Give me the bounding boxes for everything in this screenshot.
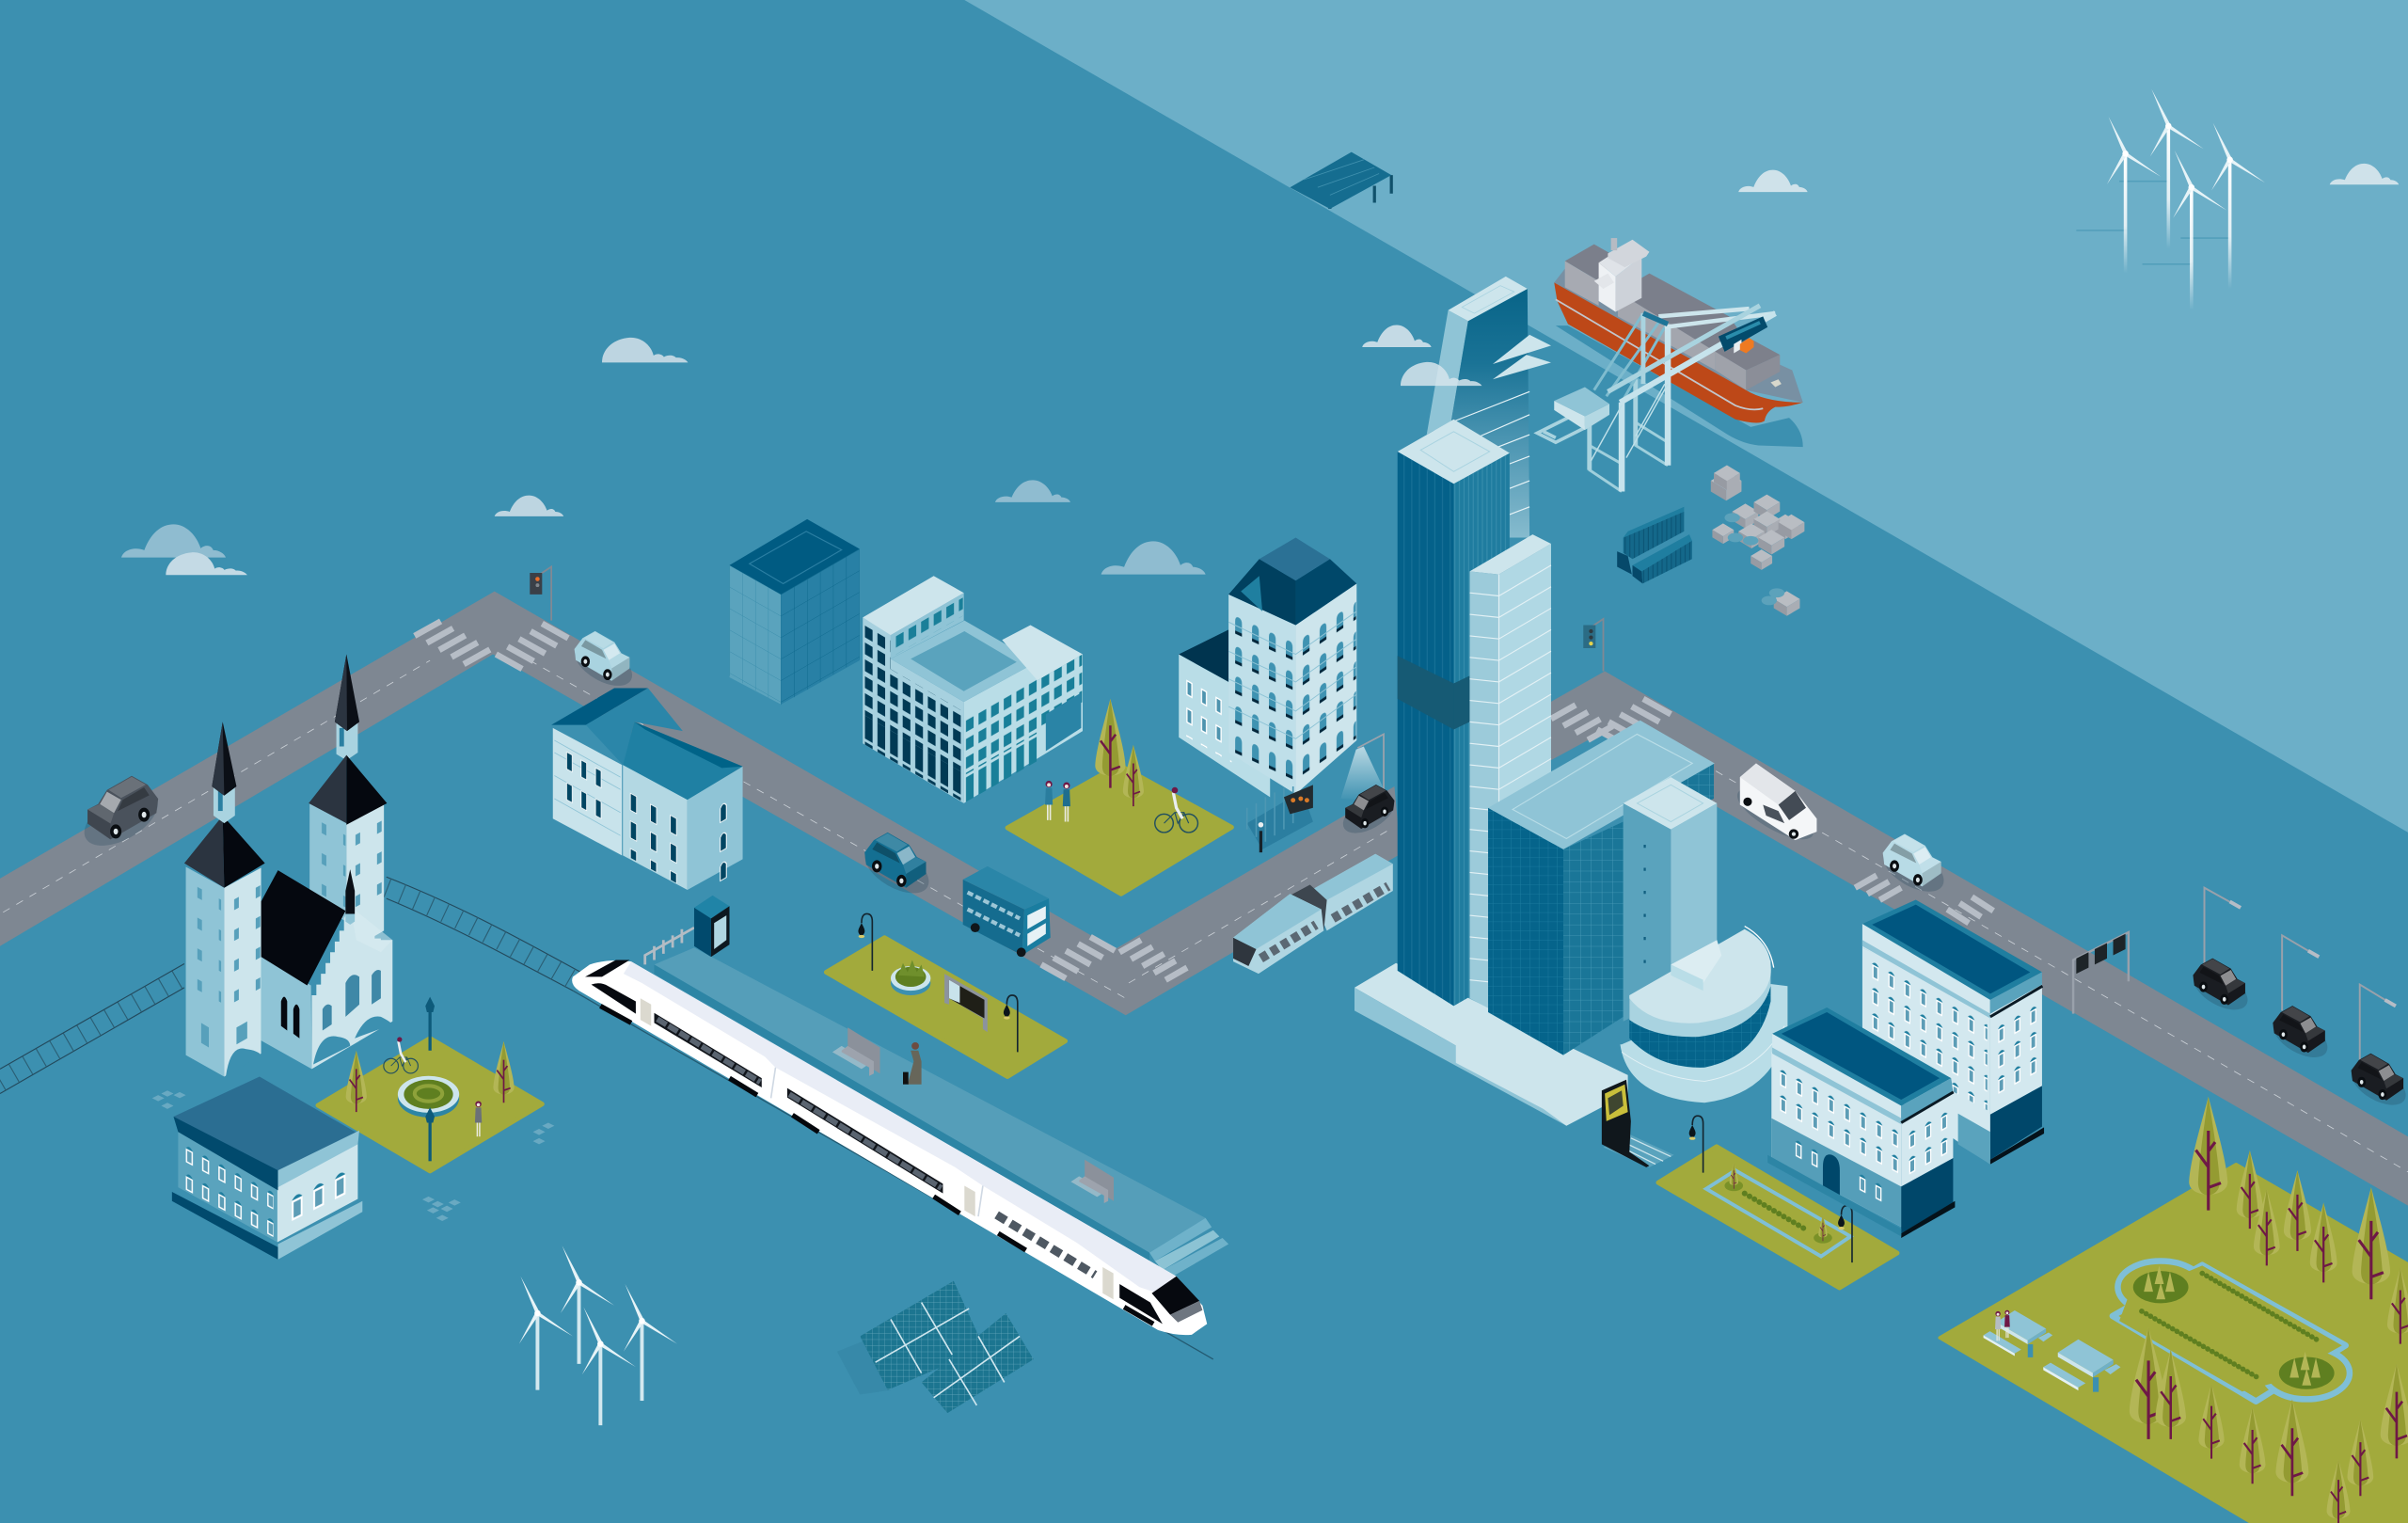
street lamp with light cone — [1340, 734, 1390, 801]
harbour crane — [1537, 306, 1775, 491]
high speed train — [572, 960, 1213, 1359]
street lamps along the highway — [2205, 888, 2396, 1060]
paving tiles — [152, 1090, 554, 1221]
church square park — [318, 997, 542, 1171]
solar panels — [837, 1281, 1034, 1413]
sea — [964, 0, 2408, 833]
pale blue car — [567, 631, 640, 694]
clouds by the tower — [1362, 325, 1482, 386]
large park — [1940, 1097, 2408, 1523]
ghost tower behind skyscraper — [1427, 277, 1551, 537]
black cars on highway — [2187, 959, 2408, 1113]
round podium building — [1620, 927, 1787, 1103]
residential block front — [1767, 1007, 1955, 1238]
double decker bus — [963, 866, 1051, 957]
clouds — [121, 164, 2399, 575]
light banded skyscraper — [1469, 534, 1551, 1014]
cargo: containers and boxes — [1617, 466, 1804, 616]
traffic light left — [530, 566, 551, 621]
office block — [863, 576, 1083, 803]
church — [184, 655, 392, 1077]
subway entrance with yellow sign — [1602, 1080, 1674, 1167]
grass strip by platform — [826, 913, 1066, 1077]
container ship — [1554, 238, 1803, 447]
skyscraper complex podium — [1354, 963, 1628, 1126]
road network — [0, 592, 2408, 1206]
residential block rear — [1862, 899, 2044, 1165]
classical building — [551, 688, 743, 903]
white delivery van — [1731, 763, 1820, 849]
glass tower block — [730, 519, 860, 705]
mid rise tower — [1624, 777, 1717, 1022]
tram — [1233, 854, 1393, 974]
civic house — [172, 1077, 362, 1260]
townhouse with mansard roof — [1179, 537, 1356, 797]
ticket booth — [694, 896, 730, 957]
pale blue car on east road — [1876, 833, 1951, 901]
glass office block — [1488, 721, 1715, 1055]
park with people and cyclist — [1007, 699, 1231, 894]
station platform — [645, 928, 1228, 1277]
tall dark skyscraper — [1398, 420, 1510, 1006]
railway tracks — [0, 877, 583, 1093]
grey car — [75, 776, 166, 857]
teal beetle car — [857, 833, 937, 903]
wind turbines on land — [519, 1245, 677, 1425]
overhead road sign gantry — [2073, 932, 2129, 1014]
small formal garden — [1658, 1116, 1897, 1288]
solar canopy on the shore — [1290, 152, 1391, 209]
subway entrance near park — [1247, 785, 1313, 852]
traffic light right — [1583, 619, 1603, 671]
wind turbines offshore — [2076, 89, 2265, 310]
black cab — [1337, 785, 1401, 841]
